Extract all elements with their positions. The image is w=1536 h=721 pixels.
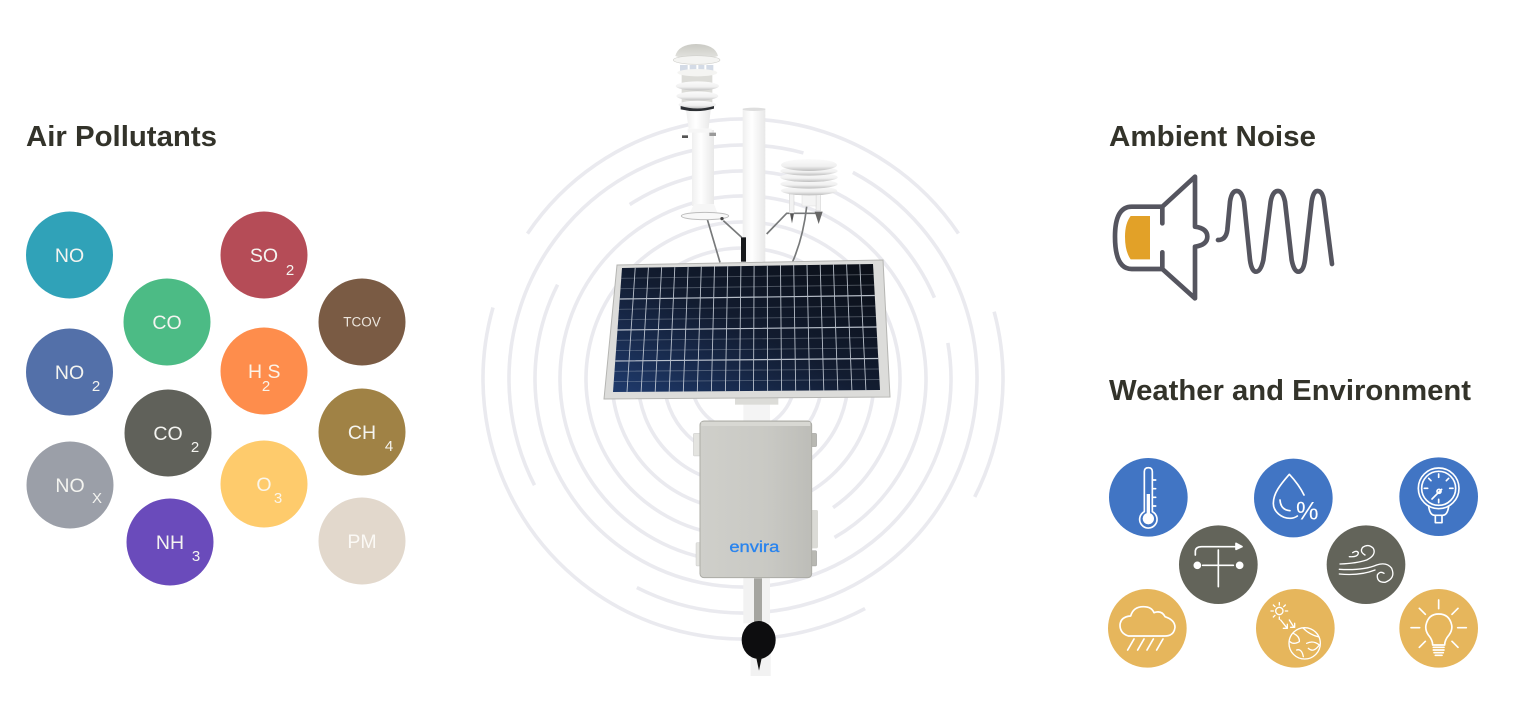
solar panel (604, 260, 890, 399)
enclosure box (693, 421, 818, 578)
icon: thermometer (1109, 458, 1188, 537)
brand label: envira (729, 539, 780, 556)
panel grid (614, 264, 879, 392)
pollutant: CO (124, 278, 210, 366)
pollutant: O3: O (256, 474, 272, 496)
icon: wind speed (1327, 525, 1405, 604)
microphone windscreen (742, 621, 776, 671)
icon: rain (1108, 589, 1187, 668)
icon: wind direction (1179, 525, 1258, 604)
pollutant: CH4: 4 (385, 438, 393, 455)
icon: light bulb (1399, 589, 1478, 668)
pollutant: CO: CO (152, 312, 182, 334)
heading: weather and environment: Weather and Environment (1109, 375, 1471, 407)
pollutant: PM: PM (347, 531, 377, 553)
pollutant: H2S: H (248, 361, 262, 383)
pollutant: NH3: 3 (192, 548, 200, 565)
pollutant: NH3 (126, 498, 214, 586)
pollutant: CO2 (124, 390, 212, 476)
pollutant: TCOV (318, 278, 406, 366)
pollutant: NOx (26, 442, 114, 528)
panel: ambient noise (1109, 121, 1332, 298)
pollutant: NOx: NO (55, 475, 85, 497)
concentric signal rings (382, 18, 1104, 721)
pollutant: CH4 (318, 388, 406, 476)
pollutant: SO2: 2 (286, 262, 294, 279)
icon: speaker and sound wave (1115, 177, 1332, 298)
central pole (741, 108, 765, 262)
pollutant: H2S: S (267, 361, 281, 383)
pollutant: NH3: NH (156, 532, 184, 554)
icons group (1108, 457, 1478, 668)
heading: ambient noise: Ambient Noise (1109, 121, 1316, 153)
pollutant: NOx: X (92, 490, 102, 507)
icon: humidity (1254, 459, 1333, 537)
panel: air pollutants (26, 121, 406, 586)
pollutant: CH4: CH (348, 422, 376, 444)
icon: humidity: % (1296, 497, 1319, 525)
heading: air pollutants: Air Pollutants (26, 121, 217, 153)
pollutant: H2S (220, 328, 308, 414)
pollutant: NO2: NO (55, 362, 84, 384)
radiation shield sensor (780, 159, 838, 224)
lower pole and bracket (735, 398, 778, 676)
pollutant: TCOV: TCOV (343, 314, 381, 330)
pollutant: CO2: 2 (191, 439, 199, 456)
pollutant: O3: 3 (274, 490, 282, 507)
support wires (707, 207, 820, 262)
pollutant: NO2 (26, 328, 113, 416)
pollutant: NO2: 2 (92, 378, 100, 395)
pollutant: SO2: SO (250, 245, 278, 267)
sensor mast and upper sensors (673, 44, 838, 262)
pollutant: NO: NO (55, 245, 84, 267)
pollutant: PM (318, 498, 406, 584)
pollutant: CO2: CO (153, 423, 183, 445)
ultrasonic weather sensor (673, 44, 729, 220)
pollutant: O3 (220, 440, 308, 528)
icon: solar radiation (1256, 589, 1335, 668)
pollutant: H2S: 2 (262, 378, 270, 395)
pollutant: NO (26, 212, 113, 298)
monitoring station device (604, 44, 890, 676)
icon: pressure gauge (1399, 457, 1478, 536)
pollutant: SO2 (220, 212, 308, 298)
panel: weather and environment (1108, 375, 1478, 668)
